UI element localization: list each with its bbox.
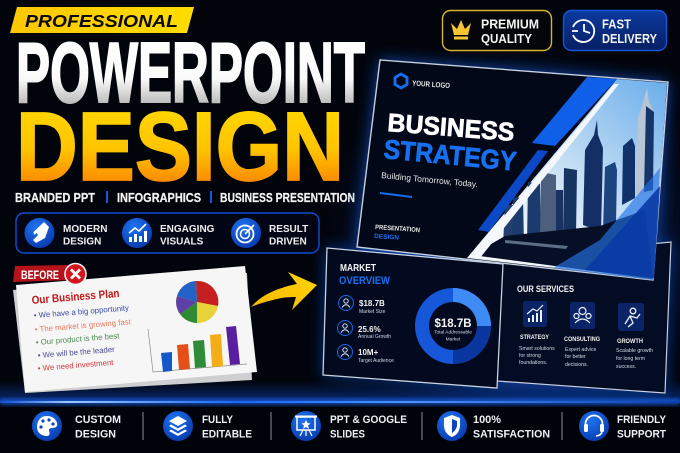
feature: ppt and google slides: SLIDES (330, 428, 365, 440)
service: growth: Scalable growth (616, 348, 653, 354)
service: consulting: Expert advice (565, 347, 597, 353)
slide footer: PRESENTATION (375, 224, 421, 234)
subtitle line: BRANDED PPT (15, 190, 95, 205)
banner: professional (10, 7, 194, 33)
feature: fully editable: EDITABLE (202, 428, 252, 440)
badge: premium quality: QUALITY (481, 32, 533, 46)
logo: YOUR LOGO (412, 79, 450, 90)
service: consulting: CONSULTING (564, 336, 600, 343)
text: modern design: DESIGN (63, 236, 101, 248)
feature: satisfaction: 100% (473, 414, 501, 426)
service: consulting (564, 302, 600, 368)
service: growth: GROWTH (617, 338, 643, 345)
slide heading: Building Tomorrow, Today. (381, 170, 478, 189)
text: modern design: MODERN (63, 224, 107, 235)
subtitle line: INFOGRAPHICS (117, 190, 201, 205)
stat: annual growth (338, 320, 391, 340)
paper stack (13, 266, 257, 393)
feature: fully editable: FULLY (202, 414, 234, 426)
slide heading: BUSINESS (387, 109, 515, 147)
stat: target audience: Target Audience (358, 358, 394, 364)
text: engaging visuals: ENGAGING (160, 224, 215, 235)
feature: custom design: DESIGN (75, 428, 116, 440)
feature: satisfaction: SATISFACTION (473, 428, 550, 440)
stat: market size: Market Size (359, 309, 386, 315)
badge: premium quality: PREMIUM (481, 18, 539, 32)
feature: custom design (32, 411, 121, 441)
slide heading (380, 109, 518, 198)
bottom glow line (0, 399, 680, 405)
service: growth (616, 303, 653, 370)
footer strip (32, 411, 667, 441)
before tag (13, 264, 86, 284)
donut chart: $18.7B (434, 318, 472, 330)
logo (395, 74, 450, 90)
slide text: Our Business Plan (31, 288, 120, 307)
heading: market overview: MARKET (340, 263, 376, 274)
panel: business strategy slide (357, 60, 668, 280)
pie chart (176, 281, 218, 323)
before slide mock: • Our product is the best (35, 331, 120, 347)
before slide mock (13, 264, 257, 393)
feature: satisfaction (437, 411, 550, 441)
before tag: BEFORE (21, 270, 59, 282)
title: powerpoint: POWERPOINT (16, 26, 365, 121)
badge: fast delivery (564, 10, 666, 50)
heading: market overview: OVERVIEW (339, 275, 391, 287)
service: strategy: for strong (519, 353, 541, 359)
heading: our services: OUR SERVICES (517, 284, 574, 295)
feature: fully editable (163, 411, 252, 441)
subtitle line (15, 190, 355, 205)
panel: services slide (497, 242, 671, 393)
stat: market size (338, 296, 386, 315)
badge: fast delivery: FAST (602, 18, 631, 32)
banner: professional: PROFESSIONAL (25, 11, 178, 31)
stat: target audience (338, 344, 394, 364)
feature: friendly support: FRIENDLY (617, 414, 667, 426)
donut chart: Total Addressable (434, 330, 472, 336)
blue diagonal overlays (470, 77, 660, 280)
service: growth: success. (616, 364, 636, 370)
stat: market size: $18.7B (359, 299, 385, 308)
slide footer (374, 224, 421, 242)
before slide mock: • We have a big opportunity (33, 303, 129, 320)
stat: annual growth: Annual Growth (358, 334, 391, 340)
stat: target audience: 10M+ (358, 348, 379, 357)
before slide mock: • We will be the leader (37, 345, 115, 360)
icon: clock (572, 20, 594, 42)
photo: city skyline (467, 79, 667, 279)
text: result driven: RESULT (269, 224, 308, 235)
donut chart (415, 288, 491, 364)
service: strategy (519, 301, 555, 366)
arrow: before to after (251, 272, 317, 310)
service: consulting: decisions. (565, 362, 588, 368)
service: strategy: Smart solutions (519, 346, 555, 352)
service: growth: for long term (616, 356, 645, 362)
before slide mock: • The market is growing fast (34, 317, 132, 334)
icon: target (231, 218, 261, 248)
slide heading: STRATEGY (382, 134, 518, 177)
slide footer: DESIGN (374, 233, 400, 242)
feature: friendly support (579, 411, 667, 441)
feature: friendly support: SUPPORT (617, 428, 666, 440)
slide glow (323, 60, 671, 393)
stat: annual growth: 25.6% (358, 325, 381, 334)
service: strategy: foundations. (519, 360, 547, 366)
subtitle line: BUSINESS PRESENTATION (220, 190, 355, 205)
title: design: DESIGN (16, 92, 344, 201)
panel: market overview slide (323, 248, 503, 388)
text: engaging visuals: VISUALS (160, 236, 204, 248)
feature box (16, 213, 319, 253)
text: result driven: DRIVEN (269, 236, 307, 248)
icon: pen nib (24, 218, 54, 248)
bar chart (148, 326, 247, 372)
feature: ppt and google slides (291, 411, 407, 441)
feature: custom design: CUSTOM (75, 414, 121, 426)
badge: fast delivery: DELIVERY (602, 32, 658, 46)
donut chart: Market (446, 336, 461, 342)
service: strategy: STRATEGY (520, 334, 550, 341)
before slide mock: • We need investment (37, 358, 115, 373)
service: consulting: for better (565, 354, 586, 360)
icon: crown (451, 20, 471, 40)
feature: ppt and google slides: PPT & GOOGLE (330, 414, 407, 426)
icon: chart (122, 218, 152, 248)
badge: premium quality (442, 10, 552, 50)
heading: market overview (339, 263, 391, 287)
